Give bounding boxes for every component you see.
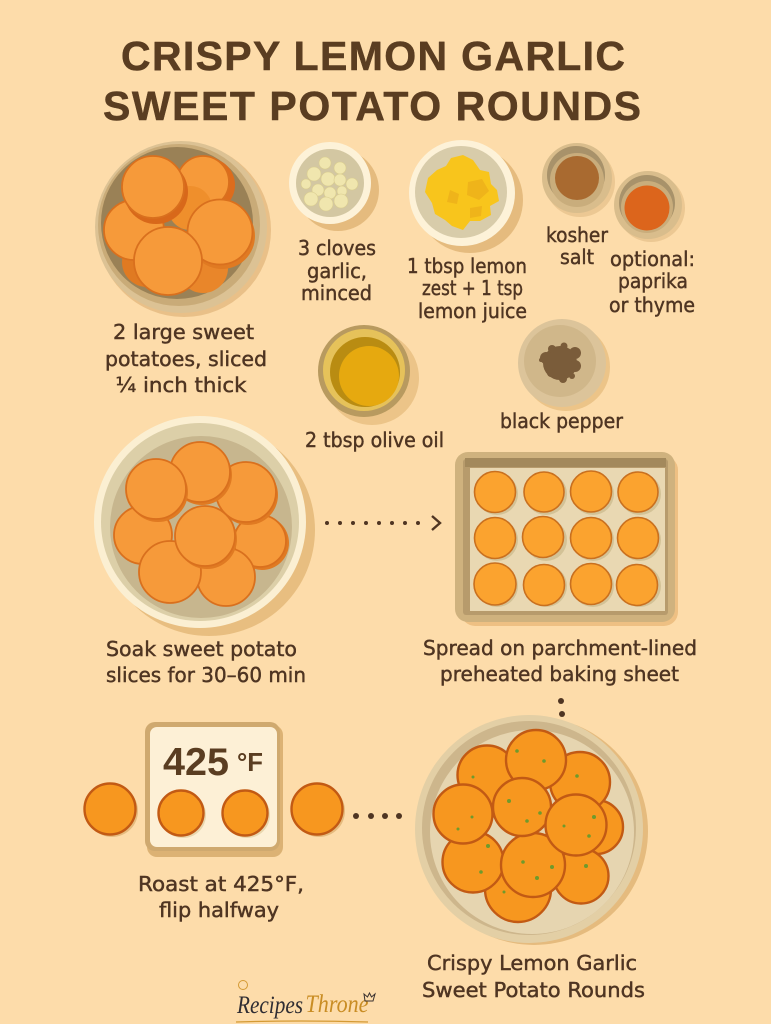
label: lemon: 1 tbsp lemon [407,254,527,278]
label: soak: Soak sweet potato [106,637,297,661]
label: lemon [407,254,527,323]
label: garlic [298,236,376,305]
label: kosher salt [546,223,609,269]
label: sweet potatoes [105,320,267,397]
label: roast: flip halfway [159,898,279,922]
icon: lemon zest bowl [409,140,523,253]
label: kosher salt: kosher [546,223,609,247]
icon: slice left of oven [84,784,138,837]
label: spread [423,636,697,686]
arrow: dots down to final plate [558,698,565,717]
label: kosher salt: salt [560,245,594,269]
label: optional spices: paprika [618,269,688,293]
label: optional spices: optional: [610,247,695,271]
label: black pepper: black pepper [500,409,624,433]
logo: Recipes Throne: Throne [306,991,368,1018]
label: garlic: minced [301,281,372,305]
icon: kosher salt bowl [542,143,615,217]
label: sweet potatoes: ¼ inch thick [116,373,247,397]
label: soak [106,637,306,687]
icon: oven with temperature: °F [237,747,263,777]
label: lemon: lemon juice [418,299,527,323]
label: spread: preheated baking sheet [440,662,679,686]
icon: black pepper bowl [518,319,610,411]
label: olive oil: 2 tbsp olive oil [305,428,444,452]
label: sweet potatoes: 2 large sweet [113,320,254,344]
label: roast [138,872,304,922]
arrow: dots to final plate [353,813,402,819]
logo: Recipes Throne: Recipes [236,992,303,1019]
icon: bowl of sweet potato slices [95,141,271,317]
label: lemon: zest + 1 tsp [422,276,523,300]
label: optional spices [609,247,695,317]
icon: garlic bowl [289,142,379,231]
icon: oven with temperature: 425 [163,741,229,784]
icon: paprika bowl [614,171,685,242]
icon: final plate of crispy rounds [415,715,648,945]
label: sweet potatoes: potatoes, sliced [105,347,267,371]
label: final dish: Crispy Lemon Garlic [427,951,637,975]
icon: oven with temperature [145,722,283,857]
icon: soaking bowl of slices [94,416,315,636]
icon: slice right of oven [292,784,345,837]
title [103,33,641,129]
label: spread: Spread on parchment-lined [423,636,697,660]
arrow: dotted to baking sheet [325,516,440,530]
title: CRISPY LEMON GARLIC [121,33,625,79]
icon: baking sheet with slices [455,452,678,626]
label: garlic: garlic, [307,259,367,283]
label: final dish: Sweet Potato Rounds [422,978,645,1002]
label: optional spices: or thyme [609,293,695,317]
label: final dish [422,951,645,1002]
icon: olive oil bowl [318,325,419,425]
title: SWEET POTATO ROUNDS [103,83,641,129]
label: roast: Roast at 425°F, [138,872,304,896]
logo: Recipes Throne [236,980,375,1022]
label: soak: slices for 30–60 min [106,663,306,687]
label: garlic: 3 cloves [298,236,376,260]
